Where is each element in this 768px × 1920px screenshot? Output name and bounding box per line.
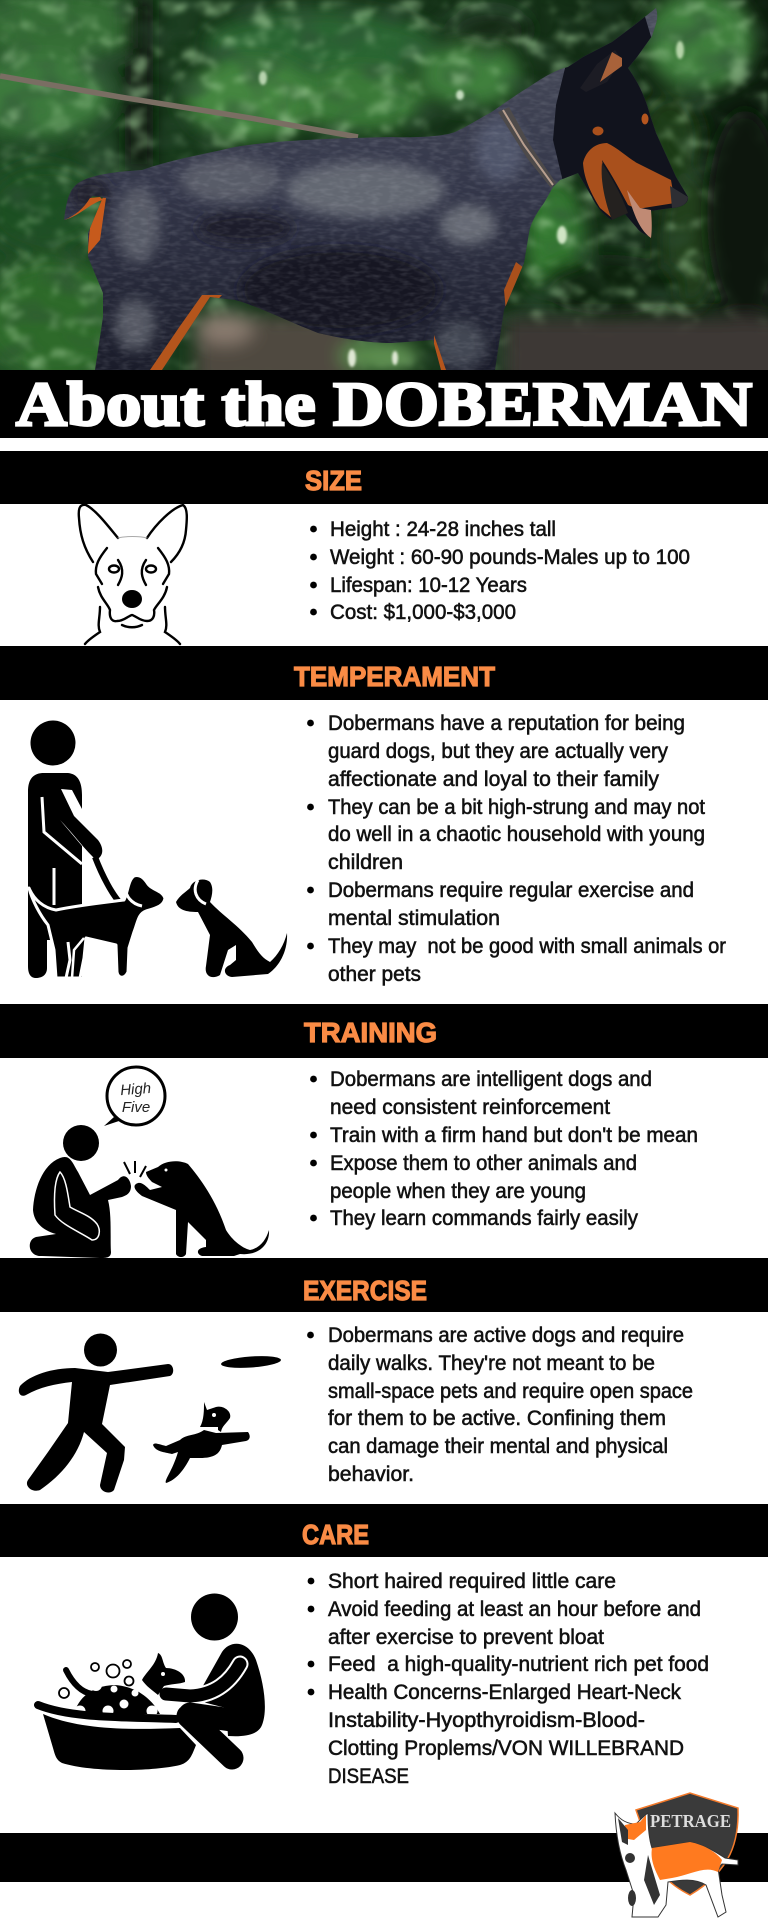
- heading band: exercise: EXERCISE: [303, 1275, 427, 1306]
- text list: training: Dobermans are intelligent dogs and: [330, 1068, 652, 1091]
- text list: exercise: small-space pets and require open space: [328, 1380, 693, 1403]
- text list: care: Avoid feeding at least an hour before and: [328, 1598, 701, 1621]
- dog head: [142, 1653, 185, 1695]
- text list: training: Train with a firm hand but don't be mean: [330, 1124, 698, 1147]
- torso: [195, 1644, 265, 1736]
- text list: training: Expose them to other animals and: [330, 1152, 637, 1175]
- panel: exercise: [0, 1258, 768, 1492]
- text list: exercise: for them to be active. Confining them: [328, 1407, 666, 1430]
- icon: person high-fiving dog: [30, 1067, 269, 1258]
- text list: care: Instability-Hyopthyroidism-Blood-: [328, 1709, 645, 1732]
- frisbee: [221, 1354, 281, 1370]
- leg: [188, 1714, 245, 1758]
- tub: [38, 1705, 176, 1719]
- text list: exercise: can damage their mental and physical: [328, 1435, 668, 1458]
- text list: size: Cost: $1,000-$3,000: [330, 601, 516, 624]
- text list: temperament: Dobermans require regular exercise and: [328, 879, 694, 902]
- speech bubble: Five: [122, 1099, 150, 1116]
- text list: care: Health Concerns-Enlarged Heart-Neck: [328, 1681, 681, 1704]
- text list: exercise: daily walks. They're not meant to be: [328, 1352, 655, 1375]
- text list: temperament: Dobermans have a reputation for being: [328, 712, 685, 735]
- text list: care: DISEASE: [328, 1765, 409, 1788]
- footer band: [0, 1833, 768, 1882]
- leash: [0, 76, 358, 137]
- logo: Petrage shield with dog: PETRAGE: [650, 1811, 731, 1831]
- text list: size: [310, 518, 690, 624]
- icon: person bathing dog in tub: [38, 1594, 265, 1770]
- heading band: training: [0, 1004, 768, 1058]
- text list: exercise: [307, 1324, 693, 1486]
- text list: temperament: other pets: [328, 963, 421, 986]
- collar: [498, 107, 556, 188]
- panel: care: [0, 1504, 768, 1788]
- text list: temperament: affectionate and loyal to their family: [328, 768, 659, 791]
- text list: training: people when they are young: [330, 1180, 586, 1203]
- speech bubble: High: [120, 1080, 152, 1099]
- text list: temperament: do well in a chaotic household with young: [328, 823, 705, 846]
- text list: size: Weight : 60-90 pounds-Males up to 100: [330, 546, 690, 569]
- text list: care: after exercise to prevent bloat: [328, 1626, 604, 1649]
- heading band: temperament: TEMPERAMENT: [294, 661, 495, 692]
- tongue: [627, 190, 652, 238]
- title: About the DOBERMAN: [16, 371, 752, 439]
- heading band: care: [0, 1504, 768, 1557]
- heading band: temperament: [0, 646, 768, 700]
- text list: size: Height : 24-28 inches tall: [330, 518, 556, 541]
- text list: temperament: They can be a bit high-strung and may not: [328, 796, 705, 819]
- text list: size: Lifespan: 10-12 Years: [330, 574, 527, 597]
- dog: [60, 0, 700, 370]
- heading band: training: TRAINING: [304, 1017, 437, 1048]
- heading band: care: CARE: [302, 1519, 369, 1550]
- text list: temperament: guard dogs, but they are actually very: [328, 740, 668, 763]
- arm: [166, 1664, 240, 1696]
- icon: person throwing frisbee to dog: [19, 1334, 281, 1492]
- heading band: exercise: [0, 1258, 768, 1312]
- text list: temperament: They may not be good with small animals or: [328, 935, 726, 958]
- text list: care: Short haired required little care: [328, 1570, 616, 1593]
- text list: training: [310, 1068, 698, 1230]
- logo: Petrage shield with dog: [615, 1793, 738, 1917]
- dog body and tail: [74, 1685, 160, 1714]
- text list: care: Feed a high-quality-nutrient rich pet food: [328, 1653, 709, 1676]
- icon: dog face outline: [79, 505, 187, 644]
- text list: training: They learn commands fairly easily: [330, 1207, 638, 1230]
- speech bubble: [104, 1067, 165, 1126]
- panel: temperament: [0, 646, 768, 986]
- text list: temperament: [307, 712, 726, 986]
- text list: temperament: mental stimulation: [328, 907, 500, 930]
- text list: temperament: children: [328, 851, 403, 874]
- panel: size: [0, 451, 768, 644]
- photo: doberman on a leash in front of foliage: [0, 0, 768, 398]
- title band: [0, 370, 768, 439]
- icon: person walking dog and sitting dog: [28, 720, 287, 978]
- text list: training: need consistent reinforcement: [330, 1096, 610, 1119]
- text list: exercise: behavior.: [328, 1463, 414, 1486]
- text list: exercise: Dobermans are active dogs and require: [328, 1324, 684, 1347]
- text list: care: Clotting Proplems/VON WILLEBRAND: [328, 1737, 684, 1760]
- heading band: size: SIZE: [305, 465, 362, 496]
- text list: care: [308, 1570, 709, 1788]
- heading band: size: [0, 451, 768, 504]
- panel: training: [0, 1004, 768, 1258]
